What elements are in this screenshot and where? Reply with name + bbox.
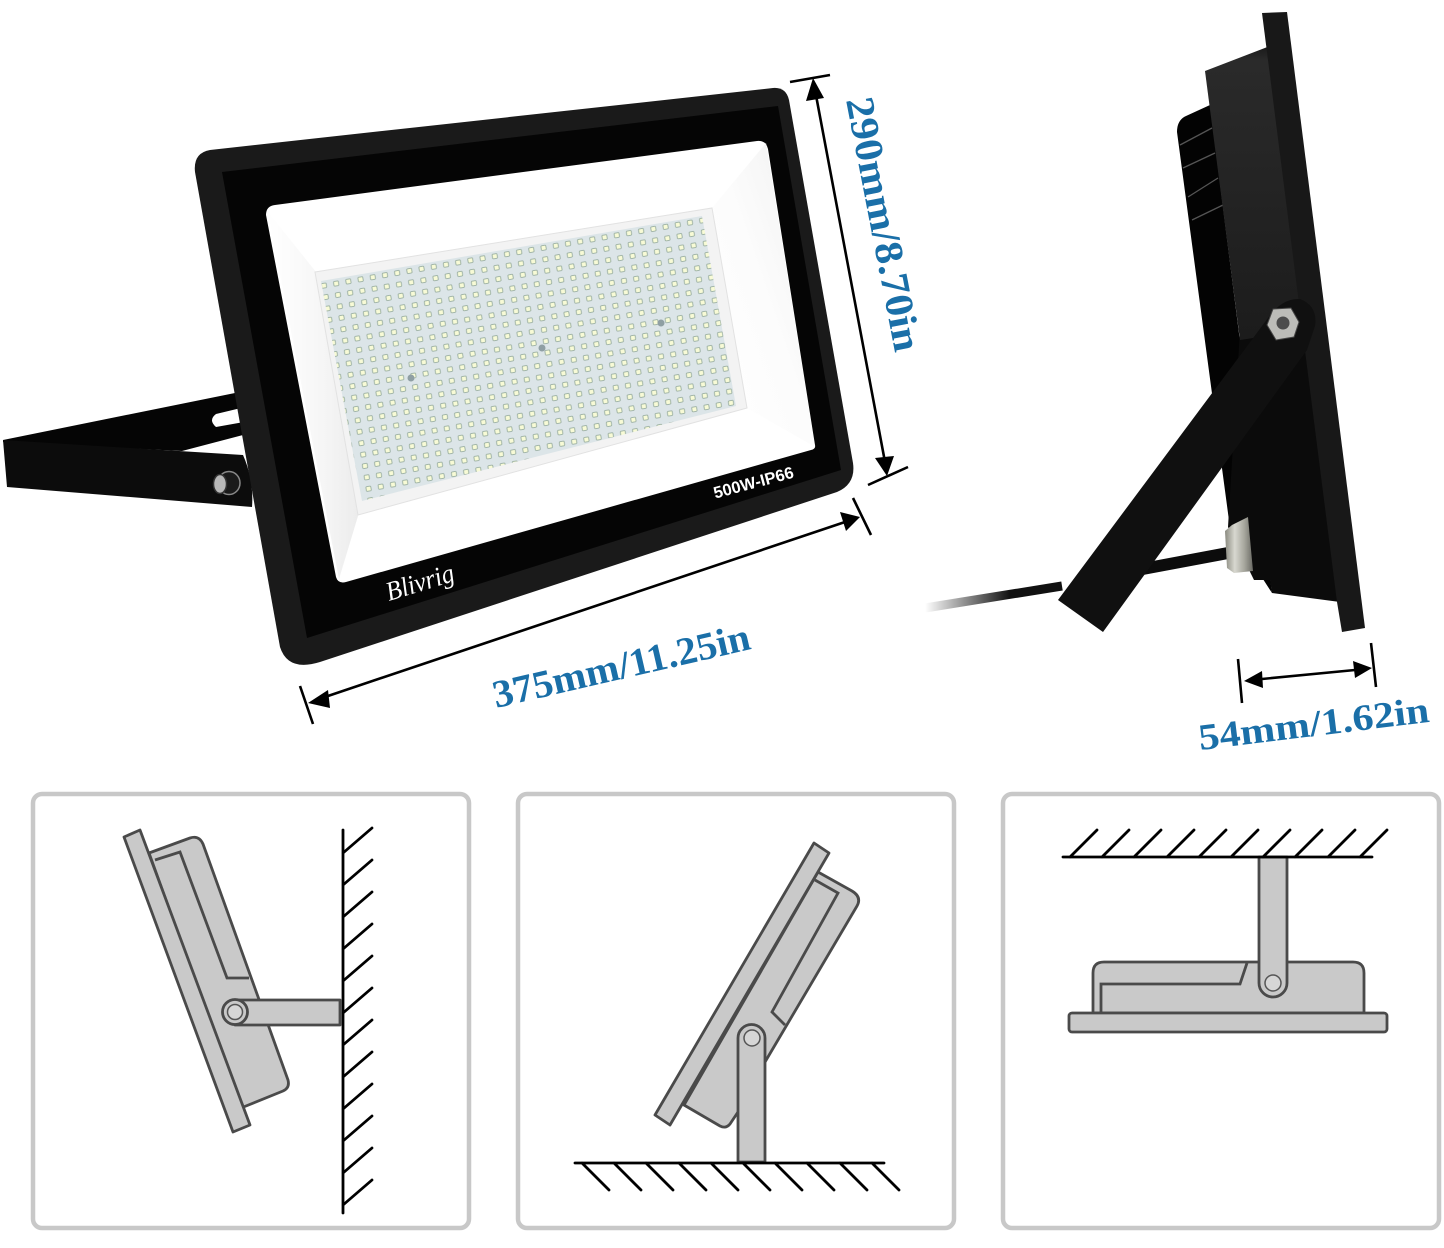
panel screw 2 [538, 344, 546, 352]
power cable behind arm [1100, 553, 1228, 577]
ground with hatching [575, 1163, 899, 1190]
side view flood light [925, 12, 1365, 632]
rear mounting bracket arm [3, 393, 243, 451]
depth dimension arrow [1238, 643, 1376, 703]
reflector white base [266, 141, 815, 582]
pivot [222, 1000, 248, 1024]
rear housing lower block [1228, 330, 1340, 602]
depth label: 54mm/1.62in [1196, 690, 1432, 759]
front view flood light [3, 88, 853, 665]
reflector right facet [712, 143, 815, 447]
width label: 375mm/11.25in [488, 616, 755, 717]
bracket slot [212, 408, 244, 427]
wall bracket [235, 1000, 340, 1025]
wall with hatching [343, 828, 372, 1213]
lamp body [149, 837, 288, 1108]
rear heat sink fins [1177, 105, 1272, 593]
front mounting bracket arm [3, 440, 252, 507]
front plate [1069, 1013, 1387, 1032]
LED array [321, 216, 736, 501]
front plate [124, 830, 250, 1132]
front plate [655, 843, 829, 1125]
lamp body [684, 872, 859, 1127]
arm bolt [1267, 308, 1299, 340]
housing outer bezel [195, 88, 853, 665]
bracket bolt [214, 472, 240, 494]
card frame [1003, 794, 1439, 1228]
height dimension arrow [790, 75, 908, 485]
panel: ground mount [518, 794, 954, 1228]
ground bracket [738, 1024, 765, 1162]
reflector left facet [268, 212, 358, 579]
rear body [1205, 46, 1306, 340]
inner step line [155, 852, 249, 978]
lamp body [1093, 962, 1364, 1013]
ceiling with hatching [1063, 830, 1387, 857]
height label: 290mm/8.70in [837, 93, 931, 355]
panel: wall mount [33, 794, 469, 1228]
pivot pin [1265, 975, 1281, 991]
brand label: Blivrig [382, 558, 458, 607]
housing inner black frame [222, 106, 841, 638]
inner step line [1101, 963, 1247, 1013]
card frame [33, 794, 469, 1228]
width dimension arrow [300, 498, 871, 724]
panel: ceiling mount [1003, 794, 1439, 1228]
pivot pin [744, 1030, 760, 1046]
LED panel rim [315, 208, 747, 515]
cable gland [1225, 517, 1253, 573]
support arm [1058, 299, 1315, 632]
power cable [925, 586, 1062, 608]
ceiling bracket [1259, 857, 1287, 997]
inner step line [772, 880, 838, 1025]
rating label: 500W-IP66 [712, 464, 796, 503]
pivot pin [228, 1004, 242, 1020]
front plate [1262, 12, 1365, 632]
panel screw 1 [408, 374, 414, 382]
card frame [518, 794, 954, 1228]
panel screw 3 [658, 320, 664, 326]
